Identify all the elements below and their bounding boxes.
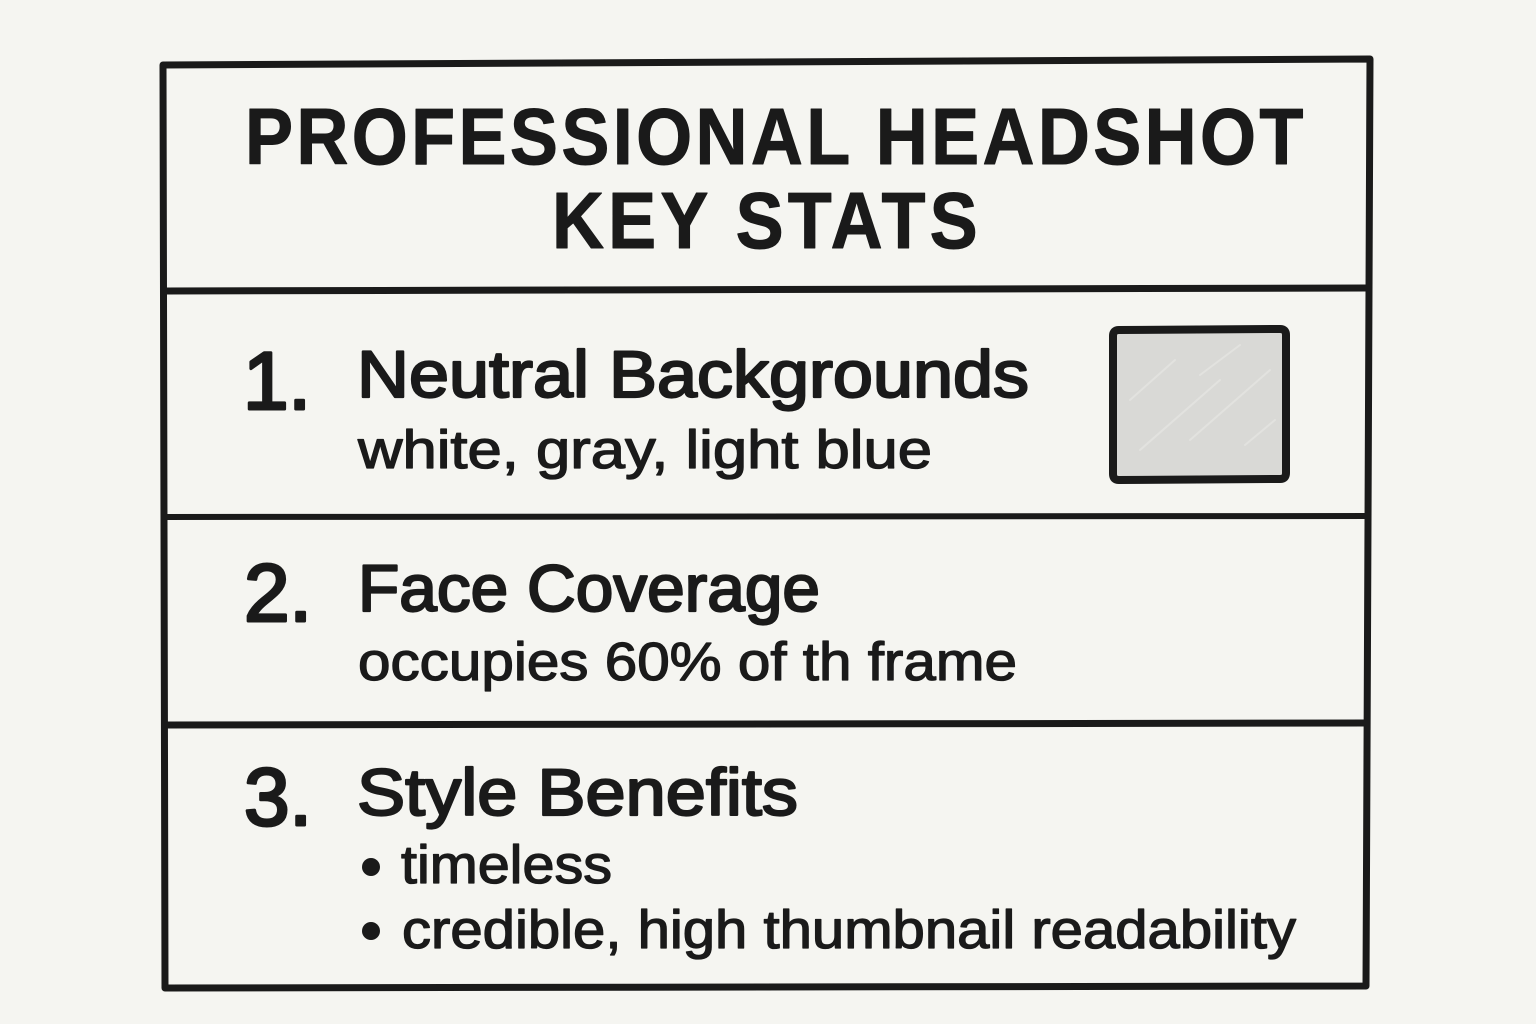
item 1 description: white, gray, light blue xyxy=(357,420,932,480)
title: PROFESSIONAL HEADSHOT xyxy=(245,93,1303,182)
divider: item 2 and item 3 xyxy=(166,723,1367,725)
divider: title and item 1 xyxy=(166,288,1367,291)
bullet: timeless: timeless xyxy=(401,835,612,895)
item 3 heading: Style Benefits xyxy=(357,755,798,829)
icon: gray background swatch xyxy=(1113,329,1286,480)
bullet: credible, high thumbnail readability: credible, high thumbnail readability xyxy=(402,900,1296,960)
panel: item 1 neutral backgrounds xyxy=(243,329,1286,480)
item 2 description: occupies 60% of th frame xyxy=(358,632,1017,692)
title xyxy=(245,93,1303,266)
title: KEY STATS xyxy=(552,177,978,266)
item 3 number: 3. xyxy=(244,752,312,843)
item 2 number: 2. xyxy=(244,548,312,639)
divider: item 1 and item 2 xyxy=(166,516,1367,517)
item 1 number: 1. xyxy=(243,336,311,427)
panel: item 3 style benefits xyxy=(244,752,1296,960)
panel: outer frame xyxy=(163,59,1370,988)
item 2 heading: Face Coverage xyxy=(358,551,820,625)
item 1 heading: Neutral Backgrounds xyxy=(357,337,1029,411)
panel: item 2 face coverage xyxy=(244,548,1017,692)
